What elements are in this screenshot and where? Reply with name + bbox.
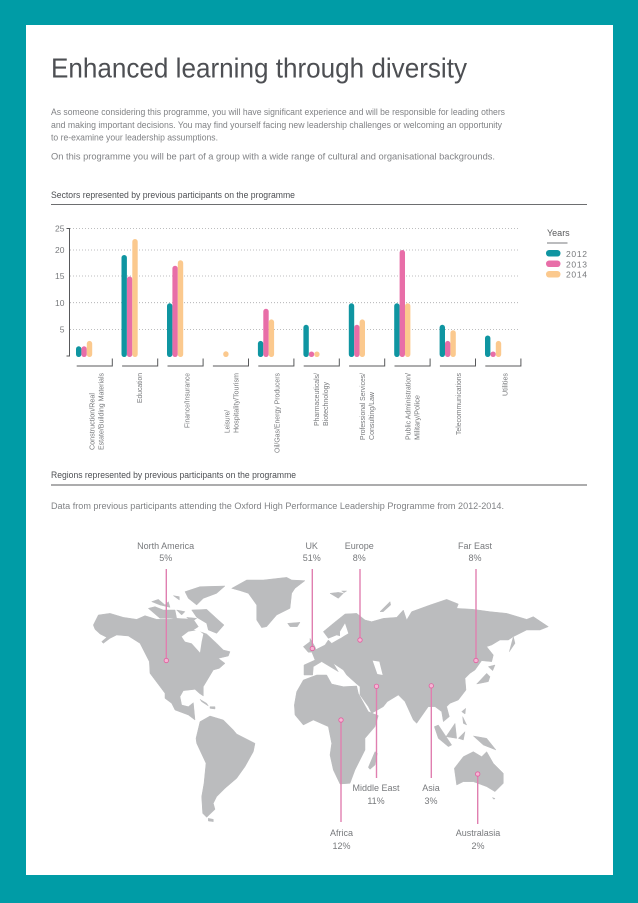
category labels: Estate/Building Materials — [96, 373, 106, 450]
legend: years — [546, 228, 587, 280]
intro text — [51, 107, 505, 162]
callout: UK — [303, 541, 321, 651]
callout: Africa: 12% — [332, 841, 351, 851]
category labels: Consulting/Law — [367, 391, 376, 440]
callout: North America — [137, 541, 194, 663]
callout: Middle East: 11% — [367, 796, 385, 806]
callout: Middle East: Middle East — [352, 783, 400, 793]
bars 2012 — [76, 255, 490, 357]
y axis labels: 15 — [55, 271, 65, 281]
intro text: and making important decisions. You may find yourself facing new leadership challenges or welcoming an opportunity — [51, 120, 502, 130]
region callouts — [137, 541, 500, 851]
category labels: Telecommunications — [454, 373, 463, 435]
callout: Africa: Africa — [330, 828, 353, 838]
intro text: As someone considering this programme, you will have significant experience and will be responsible for leading others — [51, 107, 505, 117]
legend: years: Years — [547, 228, 570, 238]
eurasia, africa and oceania — [294, 591, 548, 799]
category labels: Public Administration/ — [404, 372, 412, 440]
callout: Far East: Far East — [458, 541, 493, 551]
y axis labels: 10 — [55, 298, 65, 308]
category labels: Military/Police — [412, 395, 422, 440]
category labels: Leisure/ — [222, 409, 232, 433]
intro text: On this programme you will be part of a group with a wide range of cultural and organisational backgrounds. — [51, 152, 495, 162]
data note: Data from previous participants attending the Oxford High Performance Leadership Programme from 2012-2014. — [51, 501, 504, 511]
callout: Far East: 8% — [468, 553, 482, 563]
category labels: Utilities — [500, 373, 510, 396]
category labels: Professional Services/ — [358, 372, 367, 440]
heading: sectors: Sectors represented by previous participants on the programme — [51, 190, 295, 200]
legend: years: 2012 — [566, 249, 587, 259]
category labels: Oil/Gas/Energy Producers — [272, 373, 282, 453]
category brackets — [77, 358, 521, 366]
category labels: Finance/Insurance — [182, 373, 192, 428]
callout: Asia — [422, 684, 440, 806]
category labels: Pharmaceuticals/ — [312, 372, 321, 426]
bars 2014 — [87, 239, 501, 357]
callout: Europe: Europe — [345, 541, 374, 551]
callout: Europe: 8% — [353, 553, 366, 563]
callout: Europe — [345, 541, 374, 642]
intro text: to re-examine your leadership assumptions. — [51, 132, 218, 142]
bars 2013 — [81, 250, 496, 357]
callout: Asia: 3% — [424, 796, 438, 806]
heading: regions: Regions represented by previous participants on the programme — [51, 470, 296, 480]
y axis labels — [55, 224, 65, 334]
world map — [93, 577, 548, 822]
category labels: Education — [135, 373, 144, 403]
category labels: Hospitality/Tourism — [232, 373, 240, 433]
callout: Middle East — [352, 684, 400, 806]
y axis labels: 25 — [55, 224, 65, 234]
americas and greenland — [93, 577, 317, 822]
category labels — [88, 372, 510, 453]
legend: years: 2014 — [566, 270, 587, 280]
callout: UK: 51% — [303, 553, 321, 563]
callout: North America: 5% — [159, 553, 172, 563]
bar chart: sectors — [55, 224, 521, 453]
callout: Far East — [458, 541, 493, 663]
callout: North America: North America — [137, 541, 194, 551]
legend: years: 2013 — [566, 260, 587, 270]
category labels: Construction/Real — [88, 393, 96, 450]
callout: Australasia: 2% — [471, 841, 485, 851]
callout: UK: UK — [305, 541, 318, 551]
callout: Australasia — [456, 772, 500, 851]
y axis labels: 20 — [55, 245, 65, 255]
callout: Africa — [330, 718, 353, 851]
callout: Asia: Asia — [422, 783, 440, 793]
y axis labels: 5 — [60, 324, 65, 334]
callout: Australasia: Australasia — [456, 828, 500, 838]
title: Enhanced learning through diversity — [51, 52, 467, 84]
category labels: Biotechnology — [321, 382, 330, 426]
